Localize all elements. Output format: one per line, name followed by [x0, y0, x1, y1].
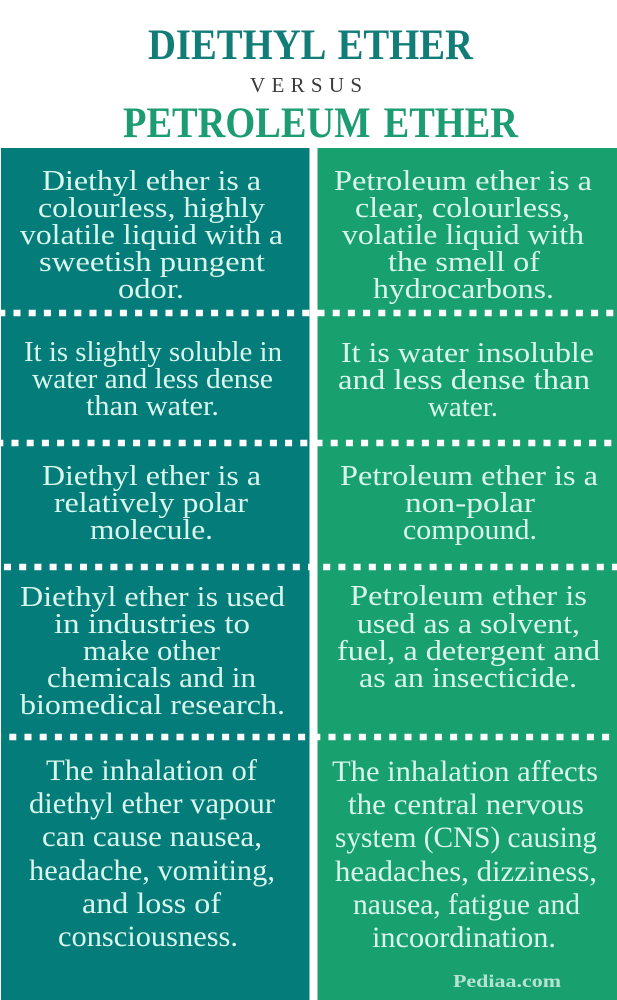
row 1 left: description — [20, 165, 283, 305]
row 4 right: uses: fuel, a detergent and — [337, 635, 601, 667]
row 2 left: solubility: water and less dense — [32, 363, 273, 395]
row 5 right: inhalation effects: nausea, fatigue and — [353, 889, 580, 921]
heading: Diethyl Ether: DIETHYL ETHER — [148, 22, 474, 69]
row 4 left: uses: Diethyl ether is used — [20, 581, 286, 613]
row 5 left: inhalation effects — [29, 755, 275, 953]
heading: versus: VERSUS — [250, 73, 362, 97]
row 1 right: description: hydrocarbons. — [373, 273, 554, 305]
row 2 right: solubility: and less dense than — [338, 364, 591, 396]
row 3 left: polarity: relatively polar — [54, 487, 248, 519]
row 4 right: uses: Petroleum ether is — [350, 580, 587, 612]
title — [123, 22, 519, 147]
row 5 left: inhalation effects: The inhalation of — [46, 755, 257, 787]
row 5 right: inhalation effects: The inhalation affects — [332, 756, 598, 788]
row 1 right: description: clear, colourless, — [355, 192, 570, 224]
row 5 right: inhalation effects: the central nervous — [348, 789, 584, 821]
row 3 right: polarity — [340, 460, 598, 546]
row 1 left: description: sweetish pungent — [39, 246, 265, 278]
row 1 right: description: Petroleum ether is a — [334, 165, 592, 197]
row 4 left: uses: chemicals and in — [47, 662, 257, 694]
row separators — [0, 313, 617, 737]
row 3 right: polarity: Petroleum ether is a — [340, 460, 598, 492]
row 2 right: solubility — [338, 337, 594, 423]
row 2 left: solubility: than water. — [86, 390, 219, 422]
row 5 right: inhalation effects — [332, 756, 598, 954]
row 5 left: inhalation effects: headache, vomiting, — [29, 855, 275, 887]
row 2 right: solubility: water. — [428, 391, 498, 423]
row 4 left: uses: make other — [83, 635, 220, 667]
row 3 left: polarity: Diethyl ether is a — [42, 460, 261, 492]
row 1 left: description: volatile liquid with a — [20, 219, 283, 251]
row 2 right: solubility: It is water insoluble — [341, 337, 594, 369]
row 4 left: uses: in industries to — [54, 608, 250, 640]
row 5 left: inhalation effects: can cause nausea, — [42, 821, 262, 853]
row 1 left: description: colourless, highly — [38, 192, 266, 224]
row 5 left: inhalation effects: diethyl ether vapour — [29, 788, 275, 820]
row 2 left: solubility — [24, 336, 282, 422]
row 5 right: inhalation effects: headaches, dizziness, — [335, 856, 597, 888]
row 4 right: uses: as an insecticide. — [359, 662, 577, 694]
panel: diethyl ether column — [1, 148, 310, 1000]
row 4 left: uses: biomedical research. — [20, 689, 285, 721]
row 3 left: polarity — [42, 460, 261, 546]
row 1 left: description: odor. — [118, 273, 184, 305]
row 3 right: polarity: compound. — [403, 514, 537, 546]
row 4 left: uses — [20, 581, 286, 721]
row 1 left: description: Diethyl ether is a — [42, 165, 261, 197]
row 5 left: inhalation effects: consciousness. — [58, 921, 238, 953]
row 1 right: description: volatile liquid with — [342, 219, 585, 251]
panel: petroleum ether column — [318, 148, 617, 1000]
row 3 right: polarity: non-polar — [405, 487, 535, 519]
row 5 right: inhalation effects: incoordination. — [372, 922, 556, 954]
heading: Petroleum Ether: PETROLEUM ETHER — [123, 100, 519, 147]
row 5 right: inhalation effects: system (CNS) causing — [335, 822, 597, 854]
row 5 left: inhalation effects: and loss of — [82, 888, 221, 920]
row 1 right: description: the smell of — [388, 246, 540, 278]
watermark: Pediaa.com: Pediaa.com — [453, 971, 561, 991]
row 4 right: uses — [337, 580, 601, 694]
row 2 left: solubility: It is slightly soluble in — [24, 336, 282, 368]
row 3 left: polarity: molecule. — [90, 514, 213, 546]
row 1 right: description — [334, 165, 592, 305]
row 4 right: uses: used as a solvent, — [357, 608, 580, 640]
